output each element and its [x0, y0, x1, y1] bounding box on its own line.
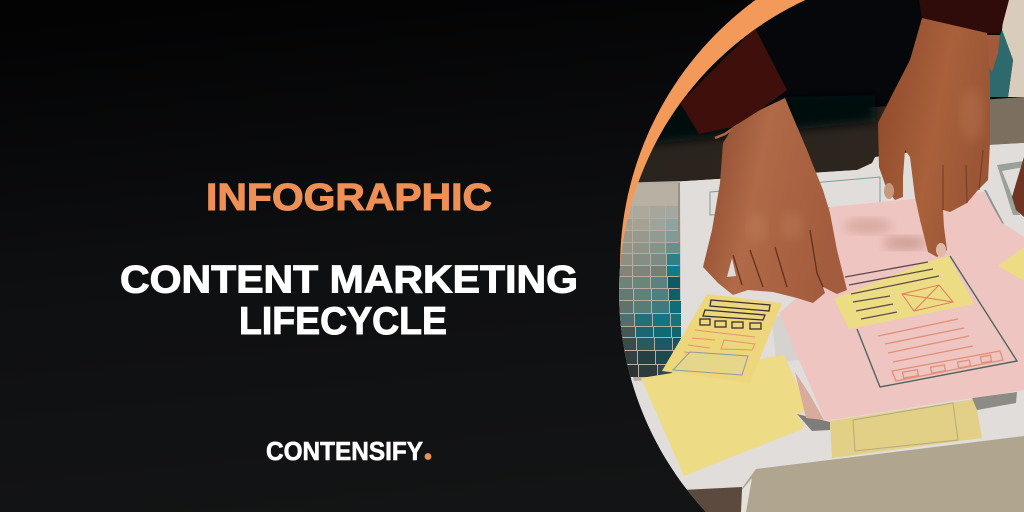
- fingernail: [884, 183, 894, 199]
- small yellow wireframe note: [662, 294, 782, 383]
- main title: [120, 258, 578, 343]
- knuckle highlights: [752, 221, 762, 235]
- photo: hands arranging paper wireframes: [610, 0, 1024, 512]
- right hand: [878, 18, 990, 257]
- sleeve cuff detail: [987, 35, 1000, 72]
- gap between thumb and finger: [727, 258, 736, 277]
- pink wireframe sheet: [779, 192, 1024, 421]
- wood shadow fade: [652, 94, 880, 149]
- yellow note on pink sheet: [834, 256, 974, 329]
- bracelet: [715, 125, 738, 138]
- orange arc accent: [620, 0, 1024, 512]
- right hand sleeve: [919, 0, 1009, 34]
- main title: CONTENT MARKETING: [120, 258, 578, 302]
- wireframe text lines: [878, 319, 1003, 381]
- left hand: [703, 98, 847, 303]
- teal object and pale wall: [987, 0, 1024, 97]
- main title: LIFECYCLE: [239, 300, 447, 343]
- wireframe outline: [857, 256, 1017, 387]
- dark backdrop: [662, 0, 1024, 130]
- top right yellow note: [998, 247, 1024, 281]
- index fingernail: [936, 243, 946, 257]
- large yellow sticky sheet: [641, 355, 809, 476]
- shadow beside yellow sheet: [797, 414, 830, 431]
- tan sheet beside pink sheet: [795, 372, 824, 420]
- white paper sheets: [640, 143, 1024, 490]
- laptop edge in foreground: [682, 436, 1024, 512]
- category heading: INFOGRAPHIC: [206, 177, 492, 219]
- second knuckle highlight: [786, 218, 798, 234]
- wooden table edge: [610, 97, 1024, 186]
- knuckle highlights: [963, 94, 982, 136]
- left forearm sleeve: [680, 28, 787, 134]
- shadow under pink sheet: [972, 392, 1017, 410]
- colour swatch chart: [619, 181, 681, 381]
- second hand fingertip at right edge: [1012, 157, 1024, 217]
- brand logo: CONTENSIFY: [266, 436, 423, 466]
- bottom yellow sheet: [830, 399, 982, 458]
